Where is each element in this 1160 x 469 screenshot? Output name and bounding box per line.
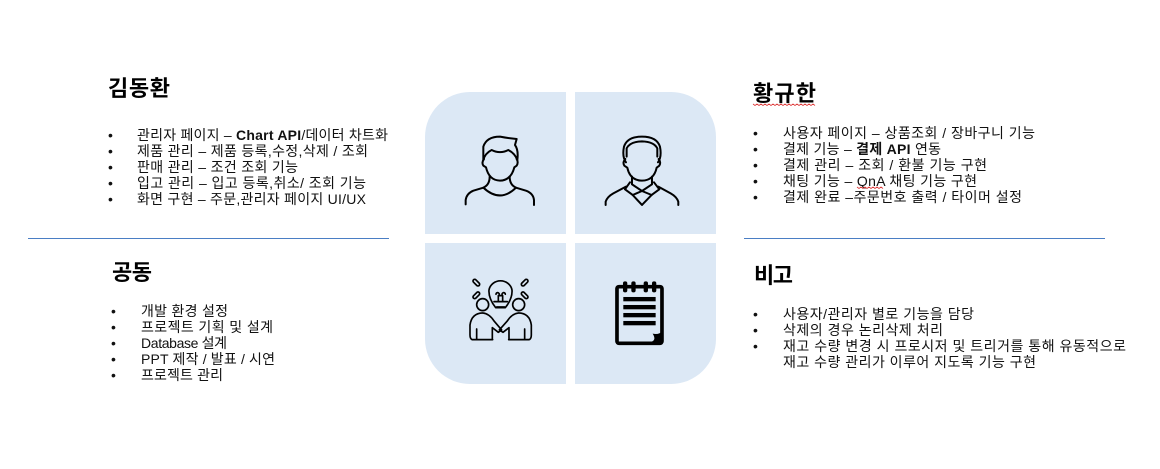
text block: 공동 tasks xyxy=(111,303,275,383)
heading: 비고: 비고 xyxy=(754,263,793,288)
icon: two people sharing an idea xyxy=(470,279,531,340)
text block: 공동 tasks: • xyxy=(111,303,116,319)
text block: 비고 notes: 재고 수량 관리가 이루어 지도록 기능 구현 xyxy=(783,354,1036,370)
heading: 김동환: 김동환 xyxy=(108,76,170,101)
text block: 비고 notes: 삭제의 경우 논리삭제 처리 xyxy=(783,322,943,338)
text block: 황규한 tasks: • xyxy=(753,125,758,141)
text block: 공동 tasks: 프로젝트 관리 xyxy=(141,367,223,383)
text block: 공동 tasks: Database 설계 xyxy=(141,335,227,351)
text block: 황규한 tasks: 채팅 기능 – QnA 채팅 기능 구현 xyxy=(783,173,977,189)
text block: 김동환 tasks: 제품 관리 – 제품 등록,수정,삭제 / 조회 xyxy=(137,143,368,159)
text block: 비고 notes: 사용자/관리자 별로 기능을 담당 xyxy=(783,306,974,322)
text block: 황규한 tasks: • xyxy=(753,157,758,173)
text block: 비고 notes xyxy=(753,306,1126,370)
text block: 공동 tasks: 프로젝트 기획 및 설계 xyxy=(141,319,273,335)
text block: 김동환 tasks: 판매 관리 – 조건 조회 기능 xyxy=(137,159,298,175)
text block: 황규한 tasks: 결제 완료 –주문번호 출력 / 타이머 설정 xyxy=(783,189,1022,205)
text block: 김동환 tasks: • xyxy=(108,143,113,159)
panel: bottom-left quadrant xyxy=(425,243,566,384)
divider: left xyxy=(28,238,389,239)
text block: 김동환 tasks: • xyxy=(108,175,113,191)
text block: 김동환 tasks: 입고 관리 – 입고 등록,취소/ 조회 기능 xyxy=(137,175,366,191)
text block: 김동환 tasks: • xyxy=(108,127,113,143)
text block: 공동 tasks: • xyxy=(111,319,116,335)
text block: 공동 tasks: • xyxy=(111,335,116,351)
heading: 황규한: 황규한 xyxy=(753,81,816,106)
text block: 황규한 tasks xyxy=(753,125,1035,205)
icon: notepad xyxy=(617,281,662,344)
text block: 황규한 tasks: 결제 관리 – 조회 / 환불 기능 구현 xyxy=(783,157,987,173)
text block: 공동 tasks: • xyxy=(111,367,116,383)
text block: 비고 notes: • xyxy=(753,322,758,338)
panel: bottom-right quadrant xyxy=(575,243,716,384)
text block: 김동환 tasks: • xyxy=(108,191,113,207)
text block: 김동환 tasks: • xyxy=(108,159,113,175)
text block: 황규한 tasks: • xyxy=(753,189,758,205)
text block: 공동 tasks: • xyxy=(111,351,116,367)
text block: 김동환 tasks xyxy=(108,127,388,207)
text block: 황규한 tasks: 사용자 페이지 – 상품조회 / 장바구니 기능 xyxy=(783,125,1035,141)
text block: 공동 tasks: PPT 제작 / 발표 / 시연 xyxy=(141,351,275,367)
heading: 공동: 공동 xyxy=(112,260,152,285)
text block: 공동 tasks: 개발 환경 설정 xyxy=(141,303,228,319)
panel: top-left quadrant xyxy=(425,92,566,234)
panel: top-right quadrant xyxy=(575,92,716,234)
text block: 비고 notes: • xyxy=(753,338,758,354)
text block: 황규한 tasks: • xyxy=(753,173,758,189)
icon: man with collared shirt xyxy=(606,137,678,205)
text block: 김동환 tasks: 관리자 페이지 – Chart API/데이터 차트화 xyxy=(137,127,388,143)
text block: 황규한 tasks: 결제 기능 – 결제 API 연동 xyxy=(783,141,941,157)
divider: right xyxy=(744,238,1105,239)
icon: man with short hair xyxy=(466,137,534,205)
text block: 비고 notes: • xyxy=(753,306,758,322)
text block: 황규한 tasks: • xyxy=(753,141,758,157)
text block: 비고 notes: 재고 수량 변경 시 프로시저 및 트리거를 통해 유동적으로 xyxy=(783,338,1126,354)
text block: 김동환 tasks: 화면 구현 – 주문,관리자 페이지 UI/UX xyxy=(137,191,367,207)
